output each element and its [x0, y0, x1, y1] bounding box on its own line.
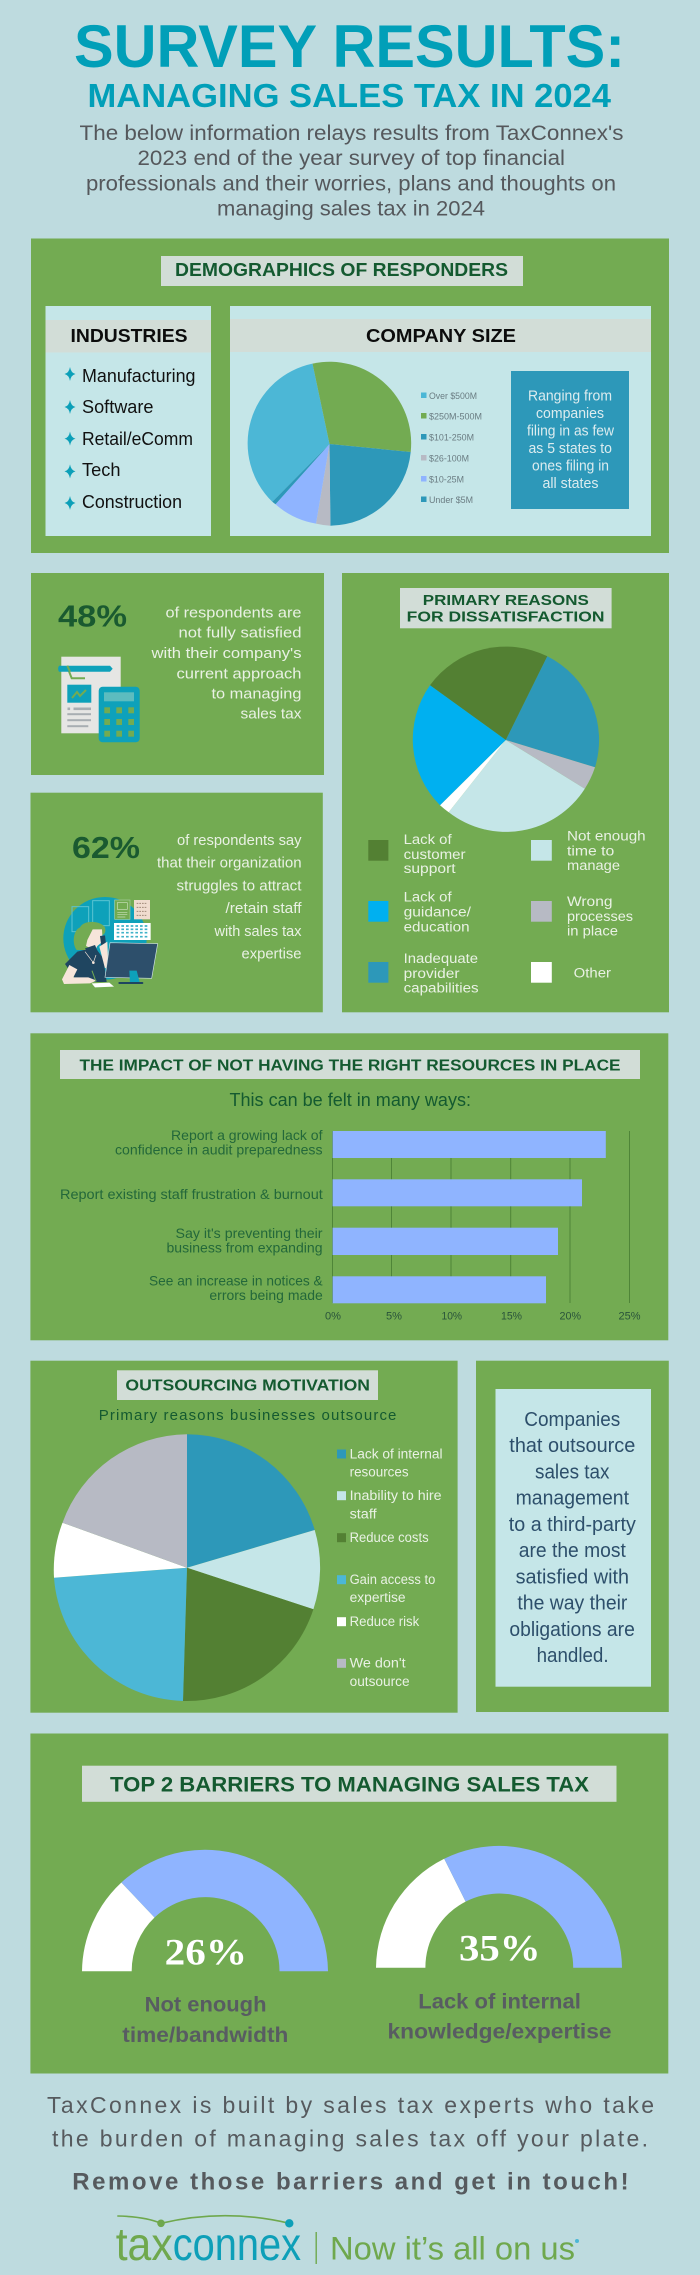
gauge: 26 percent: 26%	[165, 1931, 247, 1972]
intro text: professionals and their worries, plans and thoughts on	[86, 172, 616, 196]
heading: top 2 barriers	[82, 1766, 616, 1802]
legend: dissatisfaction: Lack of	[404, 832, 452, 847]
stat: 48%: 48%	[58, 598, 127, 634]
bar chart: impact: See an increase in notices &	[149, 1272, 323, 1288]
closing text: Remove those barriers and get in touch!	[72, 2169, 629, 2196]
text: not fully satisfied: current approach	[176, 665, 302, 682]
gauge: 26 percent: Not enough	[145, 1994, 266, 2017]
bar chart: impact: 25%	[618, 1310, 641, 1322]
heading: outsourcing motivation	[117, 1370, 378, 1400]
industries list: Manufacturing	[82, 365, 196, 386]
legend: dissatisfaction: manage	[567, 858, 620, 873]
logo: taxconnex: Now it’s all on us	[330, 2230, 575, 2266]
heading: primary reasons: PRIMARY REASONS	[423, 592, 589, 609]
legend: company size: $26-100M	[429, 453, 469, 464]
text: most satisfied: sales tax	[535, 1462, 610, 1484]
subheading: felt in many ways: This can be felt in many ways:	[230, 1089, 471, 1110]
legend: company size: $10-25M	[429, 474, 464, 485]
text: not fully satisfied: of respondents are	[166, 605, 302, 622]
panel: companies that outsource	[476, 1361, 669, 1712]
pie chart: company size	[248, 362, 411, 526]
text: most satisfied: management	[516, 1488, 629, 1510]
logo: taxconnex: tax	[116, 2218, 173, 2270]
bar chart: impact: errors being made	[209, 1287, 323, 1303]
text: not fully satisfied: not fully satisfied	[178, 625, 302, 642]
gauge: 35 percent: knowledge/expertise	[388, 2021, 612, 2044]
legend: company size	[421, 391, 482, 506]
panel: primary reasons for dissatisfaction	[342, 573, 669, 1012]
text: struggles to attract staff: expertise	[242, 946, 302, 963]
legend: outsourcing: staff	[350, 1506, 377, 1521]
closing text: the burden of managing sales tax off your plate.	[52, 2126, 648, 2152]
text: most satisfied: the way their	[517, 1593, 628, 1615]
legend: outsourcing: Inability to hire	[350, 1488, 442, 1503]
bar chart: impact: Say it's preventing their	[176, 1225, 323, 1241]
heading: impact: THE IMPACT OF NOT HAVING THE RIGHT RESOURCES IN PLACE	[80, 1057, 621, 1074]
legend: company size: $250M-500M	[429, 411, 482, 422]
pie chart: dissatisfaction	[413, 647, 599, 832]
legend: dissatisfaction: in place	[567, 924, 618, 939]
intro text: The below information relays results from TaxConnex's	[80, 122, 624, 145]
industries list: Construction	[82, 491, 182, 512]
panel: 62 percent stat	[30, 793, 323, 1012]
legend: outsourcing: Lack of internal	[350, 1446, 443, 1461]
gauge: 26 percent: time/bandwidth	[122, 2024, 288, 2047]
bar chart: impact: 5%	[386, 1310, 402, 1322]
legend: dissatisfaction: Inadequate	[404, 951, 478, 966]
legend: company size: Under $5M	[429, 495, 473, 506]
gauge: 35 percent: 35%	[459, 1928, 541, 1969]
panel: company size: COMPANY SIZE	[366, 325, 516, 346]
subheading: primary reasons businesses outsource: Primary reasons businesses outsource	[99, 1407, 396, 1424]
legend: dissatisfaction: capabilities	[404, 981, 479, 996]
text: most satisfied: are the most	[519, 1540, 626, 1562]
text: not fully satisfied: sales tax	[240, 706, 302, 723]
logo: taxconnex: connex	[173, 2218, 301, 2270]
panel: outsourcing motivation	[30, 1361, 458, 1713]
legend: outsourcing	[337, 1446, 443, 1689]
legend: outsourcing: Reduce risk	[350, 1614, 419, 1629]
closing text	[47, 2092, 654, 2196]
header	[74, 13, 625, 221]
heading: impact	[60, 1050, 640, 1079]
intro text: 2023 end of the year survey of top financial	[138, 147, 565, 170]
legend: dissatisfaction: Not enough	[567, 828, 646, 843]
text: most satisfied: handled.	[537, 1645, 609, 1667]
text: not fully satisfied	[150, 605, 302, 723]
callout: ranging from: ones filing in	[532, 459, 609, 475]
text: most satisfied	[509, 1409, 636, 1667]
stat: 62%: 62%	[72, 830, 140, 865]
legend: dissatisfaction	[368, 828, 646, 996]
subtitle: MANAGING SALES TAX IN 2024	[88, 77, 612, 114]
text: most satisfied: to a third-party	[509, 1514, 636, 1536]
legend: dissatisfaction: support	[404, 861, 456, 876]
bar chart: impact: 20%	[560, 1310, 581, 1322]
legend: dissatisfaction: guidance/	[404, 905, 471, 920]
text: struggles to attract staff: with sales tax	[214, 923, 302, 940]
legend: company size: Over $500M	[429, 391, 477, 402]
legend: dissatisfaction: Wrong	[567, 894, 612, 909]
industries list: Retail/eComm	[82, 428, 193, 449]
icon: woman on phone at computer	[62, 897, 158, 987]
title: SURVEY RESULTS:	[74, 13, 625, 80]
heading: primary reasons	[400, 588, 612, 628]
heading: demographics: DEMOGRAPHICS OF RESPONDERS	[175, 259, 508, 280]
legend: dissatisfaction: Lack of	[404, 890, 452, 905]
panel: top 2 barriers	[30, 1734, 668, 2074]
bar chart: impact: business from expanding	[166, 1240, 322, 1256]
bar chart: impact	[60, 1127, 641, 1322]
heading: primary reasons: FOR DISSATISFACTION	[407, 608, 604, 625]
text: struggles to attract staff: of respondents say	[177, 832, 302, 849]
text: most satisfied: satisfied with	[516, 1566, 629, 1588]
text: not fully satisfied: with their company's	[150, 645, 302, 662]
heading: outsourcing motivation: OUTSOURCING MOTIVATION	[125, 1377, 370, 1394]
legend: outsourcing: Reduce costs	[350, 1530, 429, 1545]
logo: taxconnex	[116, 2216, 579, 2270]
panel: 48 percent stat	[31, 573, 324, 775]
legend: dissatisfaction: education	[404, 920, 470, 935]
legend: outsourcing: We don't	[350, 1656, 406, 1671]
bar chart: impact: Report a growing lack of	[171, 1127, 323, 1143]
text: struggles to attract staff: struggles to attract	[176, 877, 302, 894]
industries list: Software	[82, 396, 154, 417]
text: most satisfied: obligations are	[509, 1619, 635, 1641]
legend: outsourcing: outsource	[350, 1674, 410, 1689]
intro text: managing sales tax in 2024	[217, 198, 485, 221]
legend: dissatisfaction: customer	[404, 847, 466, 862]
gauge: 35 percent: Lack of internal	[418, 1990, 581, 2014]
icon: document and calculator	[58, 657, 140, 742]
legend: outsourcing: expertise	[350, 1590, 406, 1605]
panel: industries: INDUSTRIES	[70, 325, 188, 346]
legend: dissatisfaction: processes	[567, 909, 633, 924]
closing text: TaxConnex is built by sales tax experts who take	[47, 2092, 654, 2118]
gauge: 35 percent	[376, 1846, 622, 2044]
bar chart: impact: Report existing staff frustration & burnout	[60, 1186, 323, 1202]
callout: ranging from: Ranging from	[528, 389, 612, 405]
legend: outsourcing: Gain access to	[350, 1572, 435, 1587]
callout: ranging from: as 5 states to	[528, 441, 612, 457]
legend: dissatisfaction: Other	[574, 966, 612, 981]
heading: demographics	[161, 256, 523, 286]
text: struggles to attract staff: that their organization	[157, 855, 302, 872]
callout: ranging from: companies	[536, 406, 604, 422]
text: struggles to attract staff	[157, 832, 302, 963]
heading: top 2 barriers: TOP 2 BARRIERS TO MANAGING SALES TAX	[110, 1774, 589, 1796]
pie chart: outsourcing	[54, 1434, 320, 1701]
industries list	[64, 365, 196, 512]
legend: dissatisfaction: provider	[404, 966, 460, 981]
callout: ranging from: filing in as few	[527, 424, 614, 440]
panel: industries	[46, 306, 211, 536]
callout: ranging from: all states	[542, 476, 598, 492]
intro text	[80, 122, 624, 221]
panel: demographics of responders	[31, 238, 669, 553]
industries list: Tech	[82, 459, 120, 480]
text: most satisfied: that outsource	[509, 1435, 635, 1457]
legend: company size: $101-250M	[429, 432, 474, 443]
text: most satisfied: Companies	[524, 1409, 620, 1431]
panel: company size	[230, 306, 651, 536]
bar chart: impact: 0%	[325, 1310, 341, 1322]
text: struggles to attract staff: /retain staff	[226, 900, 302, 917]
bar chart: impact: 10%	[442, 1310, 462, 1322]
panel: impact of not having the right resources	[30, 1033, 668, 1340]
legend: dissatisfaction: time to	[567, 843, 614, 858]
bar chart: impact: 15%	[501, 1310, 522, 1322]
gauge: 26 percent	[82, 1850, 328, 2047]
legend: outsourcing: resources	[350, 1465, 409, 1480]
callout: ranging from	[511, 371, 629, 509]
text: not fully satisfied: to managing	[212, 685, 302, 702]
bar chart: impact: confidence in audit preparedness	[115, 1142, 322, 1158]
